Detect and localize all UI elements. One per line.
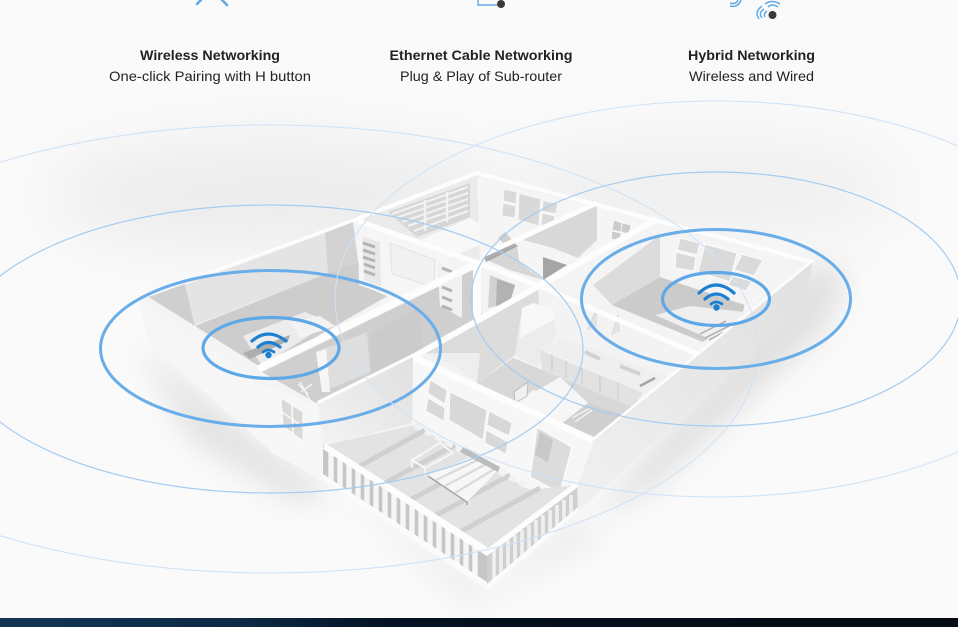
caption: hybrid networking [688, 47, 815, 84]
caption: wireless networking: One-click Pairing with H button [109, 68, 311, 84]
house silhouette [138, 172, 813, 588]
caption: hybrid networking: Wireless and Wired [689, 68, 814, 84]
lounge furniture [412, 443, 500, 505]
shelf room [357, 173, 500, 318]
kitchen wall notches [588, 310, 619, 335]
house floor plan model [138, 172, 813, 590]
upper middle rooms [477, 178, 657, 308]
grey partition wall [523, 203, 597, 258]
caption: wireless networking: Wireless Networking [140, 47, 280, 63]
interior wall tops [147, 173, 813, 441]
terrace deck [325, 425, 576, 552]
wall facing terrace [317, 357, 413, 445]
icon: wifi right [699, 285, 734, 311]
back window [502, 189, 558, 228]
right bedroom window [675, 238, 763, 291]
small floor [560, 403, 630, 442]
corner wall with window [265, 386, 325, 482]
icon: wireless networking [197, 0, 227, 5]
left bedroom [147, 222, 398, 368]
side railing [487, 481, 578, 590]
small closet [487, 245, 543, 280]
caption: ethernet cable networking: Plug & Play of Sub-router [400, 68, 562, 84]
caption: wireless networking [109, 47, 311, 84]
terrace back wall with windows [413, 361, 593, 493]
right bedroom [593, 235, 803, 342]
counter and cabinets [540, 337, 667, 407]
right exterior wall [577, 262, 813, 512]
signal rings: left router [0, 125, 758, 573]
dining ledge [518, 377, 588, 427]
closet room [262, 268, 482, 404]
signal rings: right router [335, 101, 958, 497]
dark door [488, 275, 515, 308]
icon: ethernet cable [478, 0, 505, 8]
caption: ethernet cable networking [390, 47, 572, 84]
left exterior wall [138, 298, 270, 450]
living room and kitchen [412, 285, 700, 442]
caption: hybrid networking: Hybrid Networking [688, 47, 815, 63]
chair [514, 382, 528, 403]
kitchen floor [477, 358, 633, 417]
footer bar [0, 618, 958, 627]
kitchen side wall [420, 288, 540, 383]
background shading [50, 140, 900, 605]
fridge [515, 303, 557, 367]
glass stair panel [425, 353, 480, 383]
front railing [323, 443, 487, 589]
caption: ethernet cable networking: Ethernet Cable Networking [390, 47, 572, 63]
icon: hybrid networking [730, 0, 780, 19]
icon: wifi left [252, 334, 286, 358]
